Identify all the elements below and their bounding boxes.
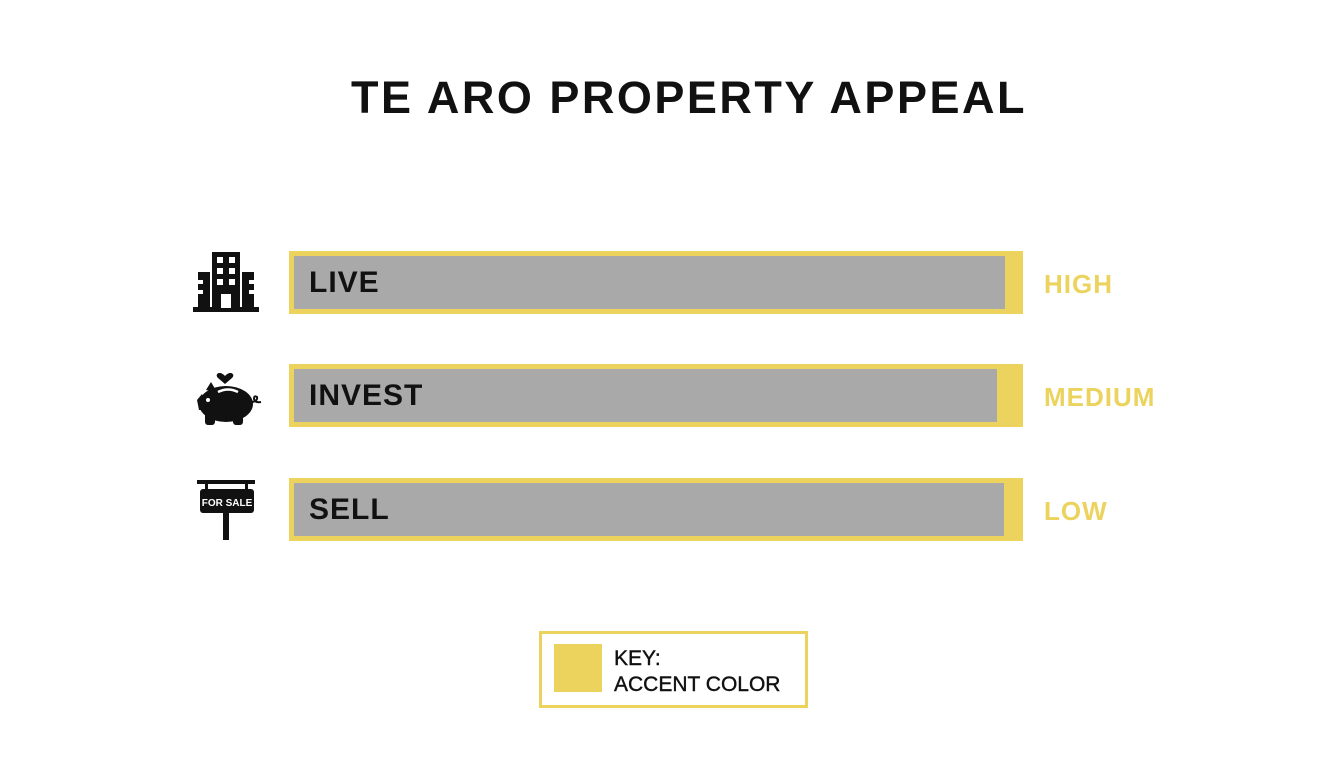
icon: piggy bank bbox=[197, 373, 262, 425]
legend key bbox=[539, 631, 808, 708]
bar: invest bbox=[289, 364, 1023, 427]
legend swatch bbox=[554, 644, 602, 692]
level: high: HIGH bbox=[1044, 269, 1113, 299]
bar: sell bbox=[289, 478, 1023, 541]
bar: invest: INVEST bbox=[309, 379, 423, 412]
bar: sell: SELL bbox=[309, 493, 390, 526]
bar: live: LIVE bbox=[309, 266, 380, 299]
legend text: ACCENT COLOR bbox=[614, 673, 780, 696]
level: medium: MEDIUM bbox=[1044, 382, 1155, 412]
bar: live bbox=[289, 251, 1023, 314]
legend text: KEY: bbox=[614, 647, 661, 670]
icon: building bbox=[193, 252, 259, 312]
icon: for sale sign bbox=[197, 480, 255, 540]
icon: for sale sign: FOR SALE bbox=[202, 498, 253, 509]
level: low: LOW bbox=[1044, 496, 1108, 526]
legend text bbox=[614, 647, 780, 696]
title: TE ARO PROPERTY APPEAL bbox=[351, 72, 1027, 123]
